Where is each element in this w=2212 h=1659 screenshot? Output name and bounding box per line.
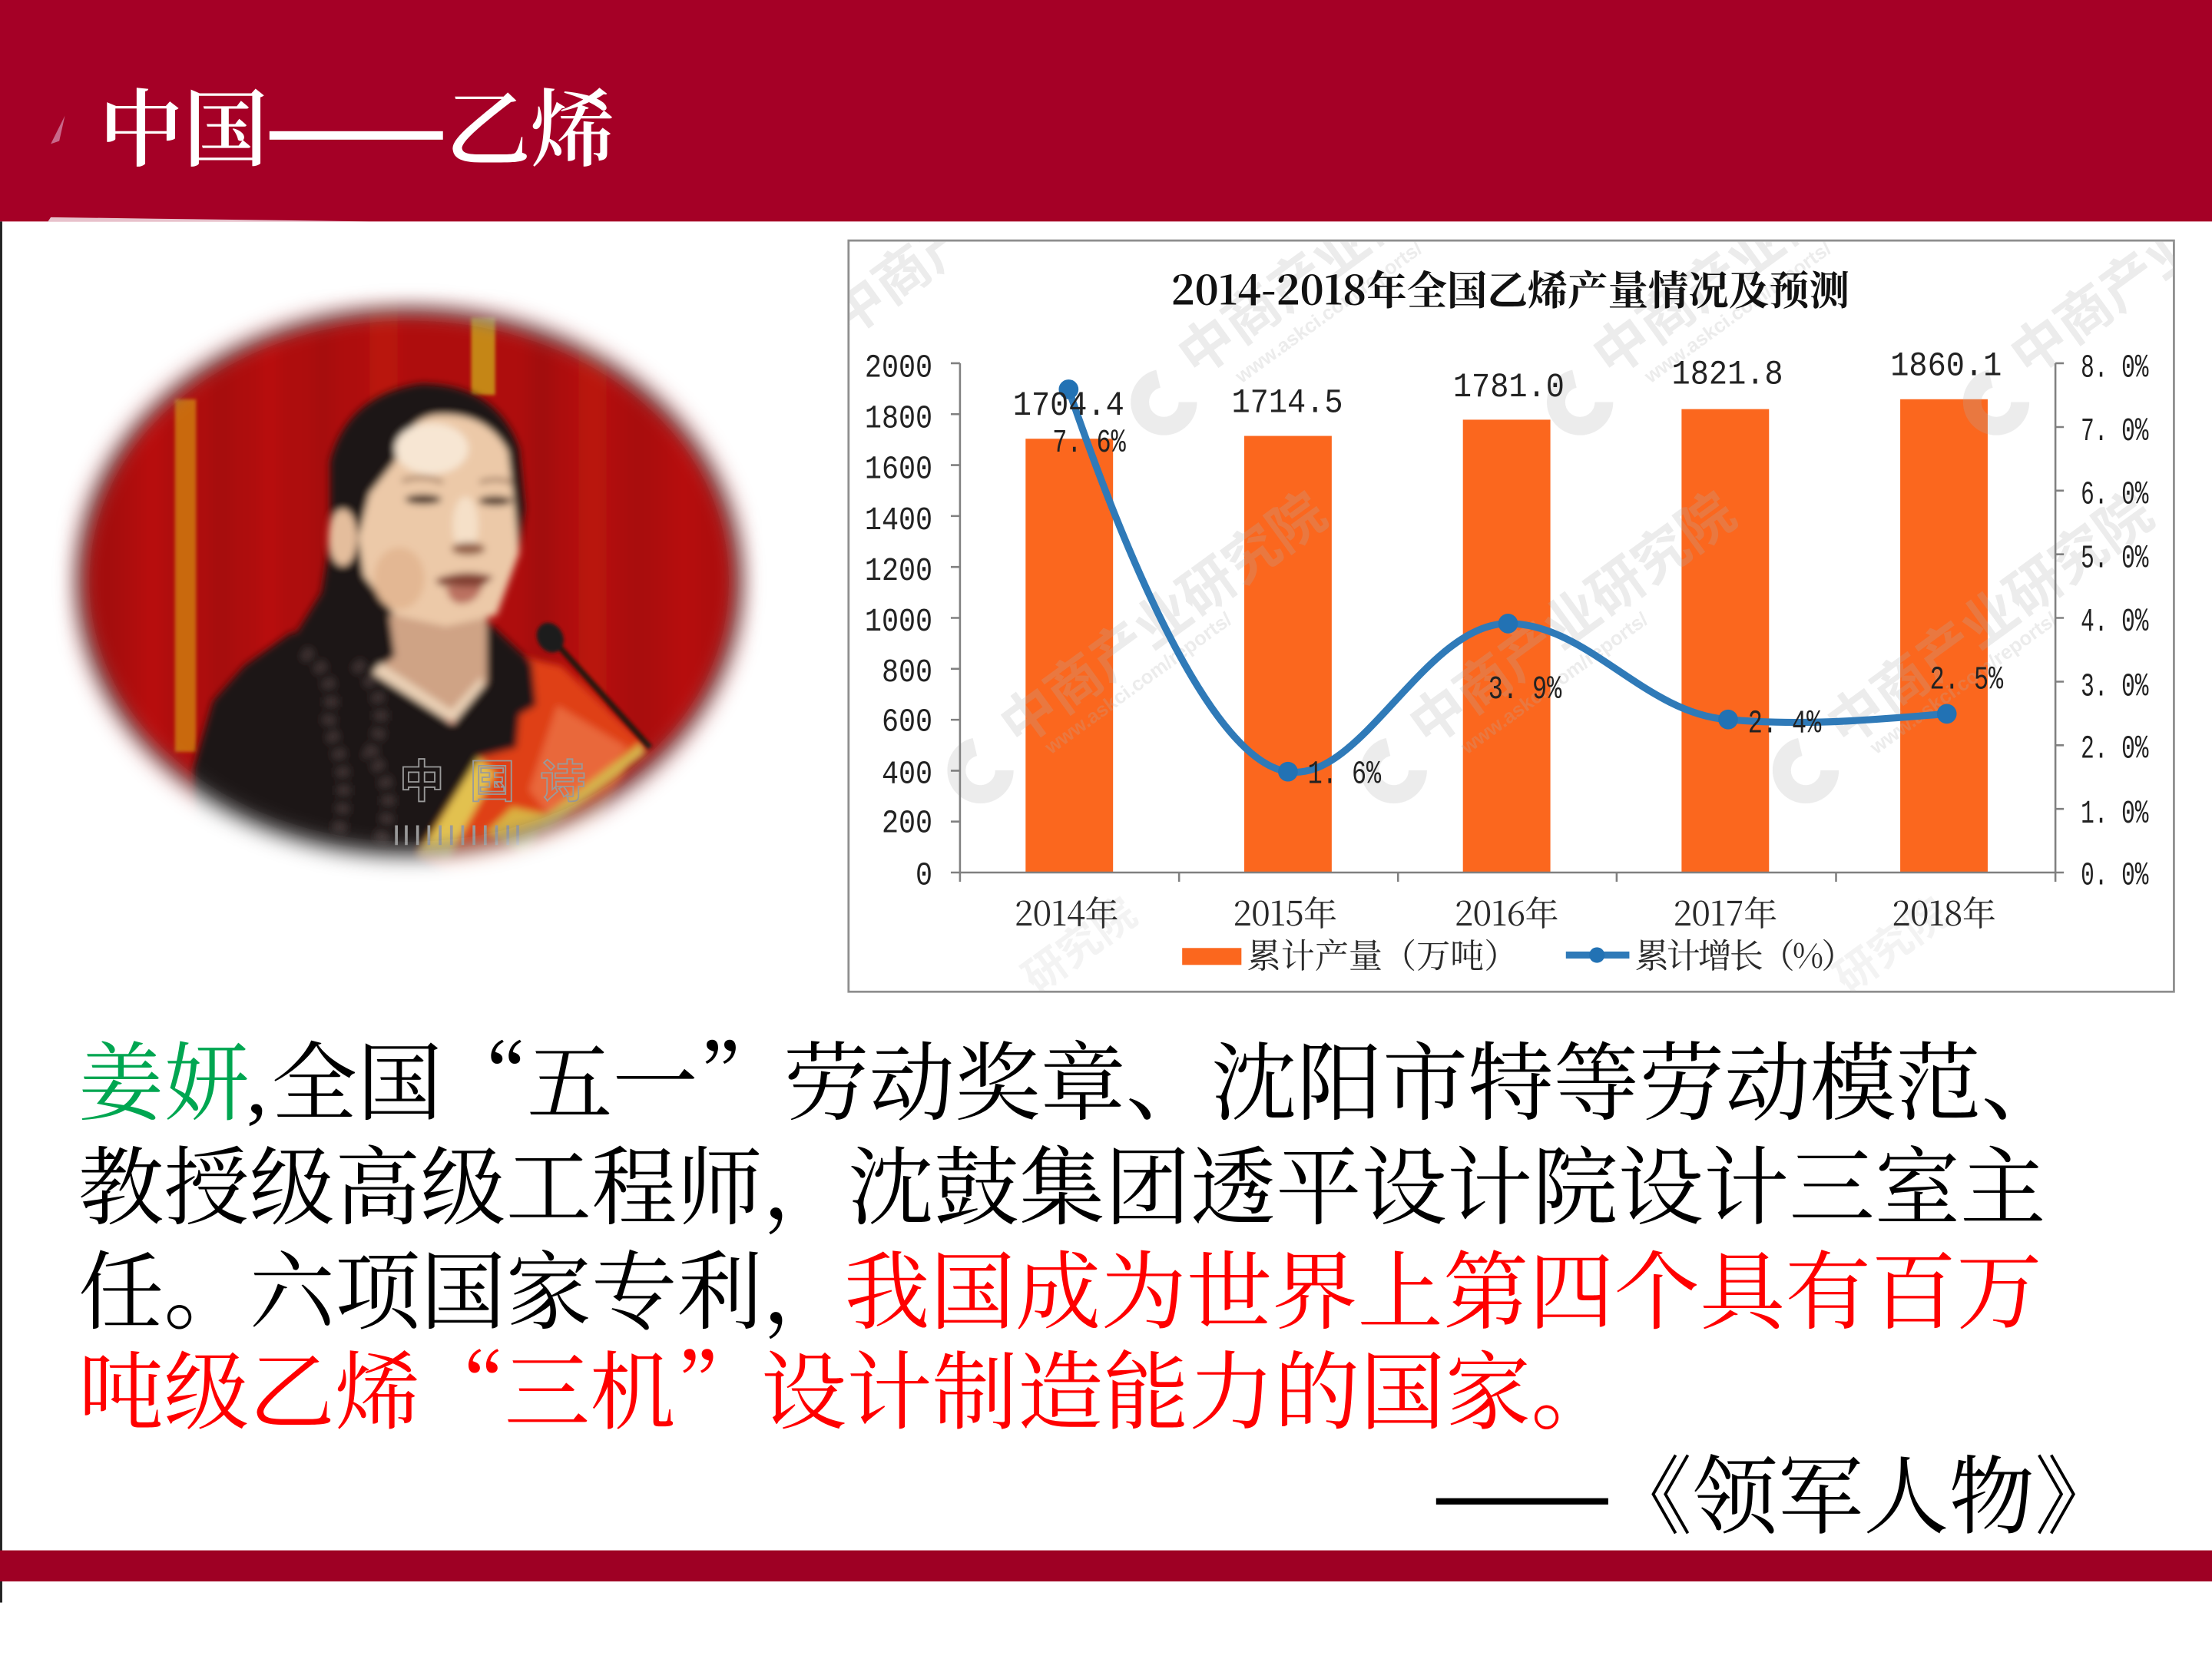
category labels: 2015年 — [1233, 886, 1337, 935]
left axis labels: 800 — [882, 654, 932, 691]
watermarks: www.askci.com/reports/ — [1041, 608, 1236, 759]
growth value labels: 1. 6% — [1308, 756, 1382, 793]
watermarks: 中商产业研究院 — [809, 61, 1167, 352]
line 1: 全国 — [272, 1015, 442, 1137]
bars: cumulative output — [1025, 399, 1988, 873]
watermarks — [849, 241, 2173, 991]
title — [99, 62, 615, 184]
left axis labels: 1600 — [865, 452, 932, 488]
right axis labels: 4. 0% — [2081, 604, 2149, 641]
watermarks: 研究院 — [1820, 880, 1958, 1005]
category labels: 2014年 — [1015, 886, 1119, 935]
footer band — [0, 1551, 2212, 1581]
watermarks: 中商产业研究院 — [1808, 470, 2166, 760]
mouth — [435, 573, 494, 588]
dark vignette — [74, 305, 745, 858]
output value labels: 1714.5 — [1231, 384, 1343, 422]
growth value labels: 7. 6% — [1052, 425, 1126, 462]
growth line — [1058, 379, 1957, 782]
line 3: 任。六项国家专利， — [78, 1224, 848, 1346]
right axis labels: 0. 0% — [2081, 858, 2149, 895]
left axis labels: 1200 — [865, 553, 932, 590]
left axis labels — [865, 349, 932, 895]
line 1: 五一 — [527, 1015, 698, 1137]
category labels: 2016年 — [1455, 886, 1559, 935]
watermarks: www.askci.com/reports/ — [1866, 608, 2061, 759]
output value labels: 1860.1 — [1890, 348, 2002, 386]
left axis labels: 1800 — [865, 401, 932, 438]
left axis labels: 600 — [882, 704, 932, 740]
curtain background — [60, 292, 759, 825]
watermarks: www.askci.com/reports/ — [1456, 608, 1652, 759]
chart frame — [849, 240, 2174, 992]
right axis labels: 1. 0% — [2081, 796, 2149, 833]
growth value labels: 2. 4% — [1748, 705, 1822, 742]
line 1: 劳动奖章、沈阳市特等劳动模范、 — [783, 1015, 2067, 1137]
line 1: , — [247, 1038, 267, 1132]
chart title: 2014-2018年全国乙烯产量情况及预测 — [1171, 259, 1849, 316]
microphone — [531, 618, 651, 747]
photo watermark bars — [396, 825, 518, 845]
growth value labels: 3. 9% — [1488, 671, 1562, 708]
text block: biography — [78, 1015, 2067, 1446]
legend: 累计产量（万吨） — [1247, 929, 1518, 978]
line 4: ” — [677, 1323, 762, 1446]
axes — [951, 363, 2064, 882]
legend: 累计增长（%） — [1635, 929, 1855, 978]
right axis labels: 7. 0% — [2081, 413, 2149, 450]
title: 乙烯 — [445, 62, 615, 184]
curly hair texture — [303, 652, 389, 846]
output value labels: 1821.8 — [1672, 356, 1783, 395]
nose — [452, 542, 485, 555]
right axis labels: 2. 0% — [2081, 730, 2149, 767]
watermarks: www.askci.com/reports/ — [1231, 237, 1426, 388]
output value labels: 1704.4 — [1013, 387, 1124, 426]
line 4: “ — [419, 1323, 505, 1446]
watermarks: 中商产业研究院 — [1574, 100, 1932, 391]
hair — [293, 384, 536, 733]
garment — [187, 626, 522, 871]
watermarks: 研究院 — [1008, 880, 1147, 1005]
category labels — [1015, 886, 1996, 935]
line 1: ” — [699, 1015, 784, 1137]
line 4: 吨级乙烯 — [78, 1323, 420, 1446]
watermarks: 中商产业研究院 — [1390, 470, 1749, 760]
left axis labels: 400 — [882, 756, 932, 793]
legend — [1182, 929, 1855, 978]
face — [359, 415, 519, 627]
eyes and brows — [405, 495, 442, 505]
attribution: 《领军人物》 — [1607, 1428, 2120, 1551]
right axis labels — [2081, 349, 2149, 895]
line 1: “ — [442, 1015, 528, 1137]
left axis labels: 1000 — [865, 604, 932, 641]
watermarks: 中商产业研究院 — [981, 470, 1339, 760]
output value labels — [1013, 348, 2002, 426]
growth value labels — [1052, 425, 2004, 793]
panel: chart — [847, 240, 2175, 993]
panel: portrait photo — [56, 290, 762, 882]
speaker figure — [194, 384, 646, 882]
output value labels: 1781.0 — [1453, 369, 1565, 407]
right axis labels: 3. 0% — [2081, 669, 2149, 706]
right axis labels: 8. 0% — [2081, 349, 2149, 386]
watermarks: 中商产业研究院 — [1159, 100, 1518, 391]
line 3: 我国成为世界上第四个具有百万 — [844, 1224, 2042, 1346]
left axis labels: 2000 — [865, 349, 932, 386]
sash — [418, 657, 642, 882]
left axis labels: 0 — [916, 858, 932, 895]
line 1: 姜妍 — [78, 1015, 250, 1137]
title: 中国 — [99, 62, 268, 184]
line 4: 三机 — [505, 1323, 675, 1446]
right axis labels: 5. 0% — [2081, 540, 2149, 577]
category labels: 2017年 — [1673, 886, 1777, 935]
watermarks: www.askci.com/reports/ — [1640, 237, 1836, 388]
left axis labels: 200 — [882, 806, 932, 843]
line 4: 设计制造能力的国家。 — [761, 1323, 1617, 1446]
line 2: 教授级高级工程师，沈鼓集团透平设计院设计三室主 — [78, 1119, 2046, 1242]
header banner — [0, 0, 2212, 221]
page left edge line — [0, 221, 2, 1603]
right axis labels: 6. 0% — [2081, 477, 2149, 514]
growth value labels: 2. 5% — [1930, 661, 2004, 698]
photo watermark: 中国诗 — [399, 745, 611, 810]
left axis labels: 1400 — [865, 502, 932, 539]
neck — [373, 615, 487, 724]
category labels: 2018年 — [1892, 886, 1996, 935]
